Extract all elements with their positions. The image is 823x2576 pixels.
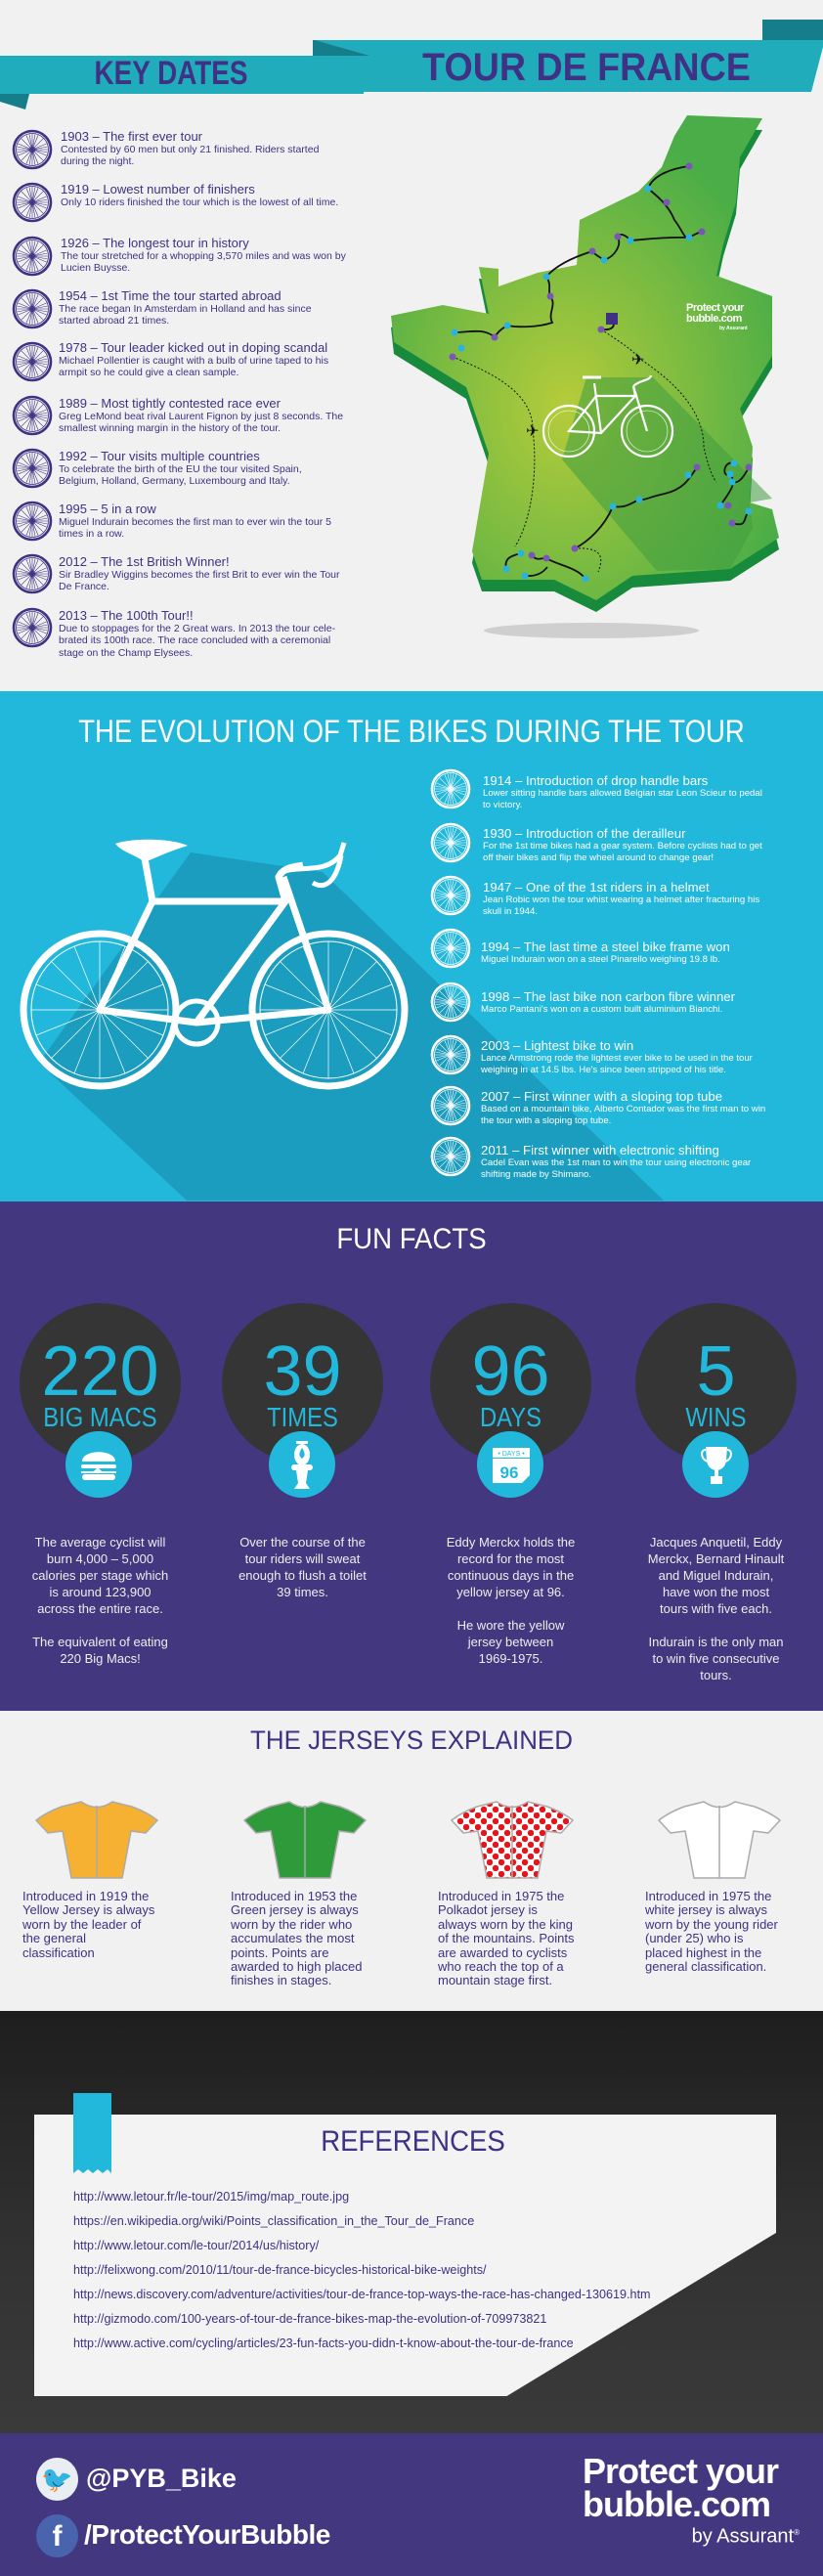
icon: facebook xyxy=(36,2514,78,2557)
jersey: white: worn by the young rider xyxy=(645,1917,778,1932)
panel: key dates list: Michael Pollentier is caught with a bulb of urine taped to his xyxy=(59,355,328,367)
panel: key dates list: 1989 – Most tightly contested race ever xyxy=(59,396,281,411)
jersey: green: accumulates the most xyxy=(231,1931,354,1945)
twitter handle: @PYB_Bike xyxy=(86,2464,237,2493)
map of route xyxy=(391,115,779,638)
fact: toilet: TIMES xyxy=(267,1402,338,1432)
icon: twitter: 🐦 xyxy=(41,2465,73,2494)
panel: fun facts xyxy=(0,1201,823,1711)
fact: toilet: Over the course of the xyxy=(239,1535,366,1550)
list: bike milestones: Jean Robic won the tour whist wearing a helmet after fracturing his xyxy=(483,895,759,905)
list: bike milestones: Lance Armstrong rode the lightest ever bike to be used in the tour xyxy=(481,1053,753,1064)
heading: fun facts: FUN FACTS xyxy=(336,1223,487,1255)
fact: days: continuous days in the xyxy=(448,1568,574,1583)
panel: key dates list: 1919 – Lowest number of finishers xyxy=(61,182,255,196)
map of route: ✈ xyxy=(526,423,539,440)
heading: references: REFERENCES xyxy=(321,2125,505,2158)
references card xyxy=(34,2115,776,2396)
text: general classification. xyxy=(645,1959,766,1974)
fact: days: DAYS xyxy=(480,1402,541,1432)
jersey: white: placed highest in the xyxy=(645,1945,761,1960)
fact: wins: and Miguel Indurain, xyxy=(659,1568,773,1583)
heading: key dates: KEY DATES xyxy=(94,55,247,92)
list: links xyxy=(73,2190,651,2350)
list: bike milestones: 2003 – Lightest bike to win xyxy=(481,1038,633,1053)
logo xyxy=(583,2451,800,2548)
list: bike milestones: Based on a mountain bike, Alberto Contador was the first man to win xyxy=(481,1104,765,1114)
panel: key dates list: smallest winning margin in the history of the tour. xyxy=(59,422,281,434)
jersey: green: Green jersey is always xyxy=(231,1902,359,1917)
fact: wins: to win five consecutive xyxy=(652,1651,780,1666)
route xyxy=(455,166,749,579)
fact: wins xyxy=(635,1303,797,1682)
logo: Protect your xyxy=(583,2451,778,2491)
text: finishes in stages. xyxy=(231,1973,331,1987)
panel: references xyxy=(0,2011,823,2433)
jersey: polka dot: Introduced in 1975 the xyxy=(438,1889,564,1903)
list: bike milestones xyxy=(430,768,765,1180)
list: bike milestones: to victory. xyxy=(483,800,522,810)
fact: wins: Merckx, Bernard Hinault xyxy=(648,1551,784,1566)
bike xyxy=(23,843,405,1086)
panel: key dates list: started abroad 21 times. xyxy=(59,315,169,327)
list: links: https://en.wikipedia.org/wiki/Points_classification_in_the_Tour_de_France xyxy=(73,2214,474,2228)
fact: toilet: enough to flush a toilet xyxy=(238,1568,367,1583)
footer xyxy=(0,2433,823,2576)
list: bike milestones: 2007 – First winner with a sloping top tube xyxy=(481,1089,722,1104)
fact: wins: WINS xyxy=(685,1402,747,1432)
list: bike milestones: shifting made by Shimano. xyxy=(481,1169,591,1180)
map of route: Protect your xyxy=(686,302,745,314)
icon: facebook: f xyxy=(53,2520,63,2553)
list: bike milestones: Lower sitting handle bars allowed Belgian star Leon Scieur to pedal xyxy=(483,788,762,799)
fact: big macs: The equivalent of eating xyxy=(32,1635,168,1649)
list: bike milestones: 1914 – Introduction of drop handle bars xyxy=(483,773,708,788)
fact: big macs: BIG MACS xyxy=(43,1402,157,1432)
logo: by Assurant® xyxy=(692,2526,800,2548)
list: bike milestones: Cadel Evan was the 1st man to win the tour using electronic gear xyxy=(481,1157,751,1168)
jersey: yellow: worn by the leader of xyxy=(22,1917,141,1932)
jersey: white: (under 25) who is xyxy=(645,1931,743,1945)
jersey: green xyxy=(231,1801,367,1987)
jersey: yellow: Introduced in 1919 the xyxy=(22,1889,149,1903)
list: bike milestones: Miguel Indurain won on a steel Pinarello weighing 19.8 lb. xyxy=(481,954,720,965)
facebook handle: /ProtectYourBubble xyxy=(84,2519,330,2550)
map of route: bubble.com xyxy=(686,313,742,325)
fact: big macs: The average cyclist will xyxy=(35,1535,165,1550)
fact: wins: Jacques Anquetil, Eddy xyxy=(650,1535,782,1550)
panel: key dates list: 1978 – Tour leader kicked out in doping scandal xyxy=(59,340,327,355)
fact: wins: have won the most xyxy=(663,1585,769,1599)
fact: wins: 5 xyxy=(696,1332,736,1411)
panel: key dates list: Sir Bradley Wiggins becomes the first Brit to ever win the Tour xyxy=(59,569,340,581)
map of route: ✈ xyxy=(631,352,644,369)
fact: big macs: is around 123,900 xyxy=(49,1585,152,1599)
fact: toilet: 39 times. xyxy=(277,1585,328,1599)
jersey: green: worn by the rider who xyxy=(231,1917,352,1932)
jersey: polka dot: of the mountains. Points xyxy=(438,1931,574,1945)
heading: evolution: THE EVOLUTION OF THE BIKES DURING THE TOUR xyxy=(78,714,745,749)
list: bike milestones: 1930 – Introduction of the derailleur xyxy=(483,826,685,841)
jersey: polka dot: Polkadot jersey is xyxy=(438,1902,538,1917)
list: bike milestones: 1947 – One of the 1st riders in a helmet xyxy=(483,880,710,895)
panel: key dates list: Lucien Buysse. xyxy=(61,262,130,274)
jersey: polka dot: are awarded to cyclists xyxy=(438,1945,567,1960)
panel: key dates list: during the night. xyxy=(61,155,134,167)
fact: days: He wore the yellow xyxy=(457,1618,564,1633)
fact: days: 1969-1975. xyxy=(479,1651,542,1666)
jersey: white: white jersey is always xyxy=(645,1902,767,1917)
icon: twitter xyxy=(36,2458,78,2501)
list: bike milestones: 1998 – The last bike non carbon fibre winner xyxy=(481,989,735,1004)
panel: key dates list: times in a row. xyxy=(59,528,124,540)
panel: key dates list: brated its 100th race. The race concluded with a ceremonial xyxy=(59,634,330,646)
list: bike milestones: the tour with a sloping top tube. xyxy=(481,1115,611,1126)
panel: key dates list: The tour stretched for a whopping 3,570 miles and was won by xyxy=(61,250,346,262)
text: who reach the top of a xyxy=(438,1959,564,1974)
fact: days: Eddy Merckx holds the xyxy=(447,1535,575,1550)
panel: key dates list: stage on the Champ Elysees. xyxy=(59,647,193,659)
ribbon xyxy=(73,2093,111,2173)
panel: key dates list: 1903 – The first ever tour xyxy=(61,129,202,144)
list: links: http://www.letour.com/le-tour/2014/us/history/ xyxy=(73,2239,319,2252)
panel: key dates list: The race began In Amsterdam in Holland and has since xyxy=(59,303,312,315)
panel: key dates list: Contested by 60 men but only 21 finished. Riders started xyxy=(61,144,319,155)
jersey: green: points. Points are xyxy=(231,1945,328,1960)
panel: key dates list: Belgium, Holland, Germany, Luxembourg and Italy. xyxy=(59,475,290,487)
panel: key dates list: Only 10 riders finished the tour which is the lowest of all time. xyxy=(61,196,338,208)
title: TOUR DE FRANCE xyxy=(422,46,751,89)
fact: big macs: calories per stage which xyxy=(32,1568,168,1583)
fact: days: • DAYS • xyxy=(498,1451,525,1458)
jersey: white xyxy=(645,1801,781,1974)
fact: big macs: across the entire race. xyxy=(37,1601,163,1616)
list: links: http://gizmodo.com/100-years-of-tour-de-france-bikes-map-the-evolution-of-709973821 xyxy=(73,2312,546,2326)
logo: bubble.com xyxy=(583,2484,770,2524)
list: bike milestones: skull in 1944. xyxy=(483,906,538,917)
jersey: yellow: Yellow Jersey is always xyxy=(22,1902,154,1917)
panel: key dates list: De France. xyxy=(59,581,109,592)
fact: days: jersey between xyxy=(468,1635,553,1649)
bike on map xyxy=(543,375,672,457)
fact: toilet xyxy=(222,1303,383,1599)
list: bike milestones: Marco Pantani's won on a custom built aluminium Bianchi. xyxy=(481,1004,722,1015)
fact: days xyxy=(430,1303,591,1666)
fact: toilet: 39 xyxy=(263,1332,342,1411)
fact: days: 96 xyxy=(471,1332,550,1411)
panel: key dates list: 1954 – 1st Time the tour started abroad xyxy=(59,288,282,303)
list: links: http://www.active.com/cycling/articles/23-fun-facts-you-didn-t-know-about-the-tour-de-france xyxy=(73,2336,574,2350)
panel: key dates list: 1926 – The longest tour in history xyxy=(61,236,249,250)
jersey: yellow xyxy=(22,1801,158,1960)
peel corner xyxy=(0,2011,823,2433)
list: bike milestones: weighing in at 14.5 lbs. He's since been stripped of his title. xyxy=(481,1065,726,1075)
list: bike milestones: For the 1st time bikes had a gear system. Before cyclists had to get xyxy=(483,841,762,851)
panel: evolution of bikes xyxy=(0,691,823,1201)
fact: toilet: tour riders will sweat xyxy=(245,1551,360,1566)
panel: key dates list: Greg LeMond beat rival Laurent Fignon by just 8 seconds. The xyxy=(59,411,343,422)
jersey: polka dot xyxy=(438,1801,574,1987)
panel: key dates list: Miguel Indurain becomes the first man to ever win the tour 5 xyxy=(59,516,331,528)
panel: key dates list: 1992 – Tour visits multiple countries xyxy=(59,449,260,463)
list: links: http://felixwong.com/2010/11/tour-de-france-bicycles-historical-bike-weights/ xyxy=(73,2263,487,2277)
fact: days: 96 xyxy=(500,1463,518,1482)
list: bike milestones: off their bikes and flip the wheel around to change gear! xyxy=(483,852,714,863)
map of route: by Assurant xyxy=(719,326,748,331)
jersey: white: Introduced in 1975 the xyxy=(645,1889,771,1903)
panel: key dates list xyxy=(12,129,346,659)
list: bike milestones: 1994 – The last time a steel bike frame won xyxy=(481,939,730,954)
fact: big macs: 220 xyxy=(41,1332,159,1411)
list: links: http://news.discovery.com/adventure/activities/tour-de-france-top-ways-the-race-has-changed-130619.htm xyxy=(73,2288,651,2301)
list: bike milestones: 2011 – First winner with electronic shifting xyxy=(481,1143,719,1157)
panel: key dates list: armpit so he could give a clean sample. xyxy=(59,367,238,378)
panel: key dates list: Due to stoppages for the 2 Great wars. In 2013 the tour cele- xyxy=(59,623,335,634)
jersey: yellow: the general xyxy=(22,1931,86,1945)
text: mountain stage first. xyxy=(438,1973,552,1987)
panel: key dates list: To celebrate the birth of the EU the tour visited Spain, xyxy=(59,463,302,475)
fact: big macs xyxy=(20,1303,181,1666)
jersey: yellow: classification xyxy=(22,1945,95,1960)
jersey: green: Introduced in 1953 the xyxy=(231,1889,357,1903)
fact: big macs: 220 Big Macs! xyxy=(60,1651,141,1666)
text: awarded to high placed xyxy=(231,1959,362,1974)
panel: key dates list: 1995 – 5 in a row xyxy=(59,502,156,516)
fact: wins: tours. xyxy=(700,1668,732,1682)
fact: wins: tours with five each. xyxy=(660,1601,772,1616)
heading: jerseys explained: THE JERSEYS EXPLAINED xyxy=(250,1725,573,1755)
fact: days: yellow jersey at 96. xyxy=(456,1585,565,1599)
panel: key dates list: 2012 – The 1st British Winner! xyxy=(59,554,230,569)
fact: days: record for the most xyxy=(457,1551,564,1566)
header banners xyxy=(0,20,823,109)
fact: wins: Indurain is the only man xyxy=(648,1635,784,1649)
jersey: polka dot: always worn by the king xyxy=(438,1917,573,1932)
list: links: http://www.letour.fr/le-tour/2015/img/map_route.jpg xyxy=(73,2190,349,2204)
fact: big macs: burn 4,000 – 5,000 xyxy=(47,1551,153,1566)
panel: key dates list: 2013 – The 100th Tour!! xyxy=(59,608,194,623)
